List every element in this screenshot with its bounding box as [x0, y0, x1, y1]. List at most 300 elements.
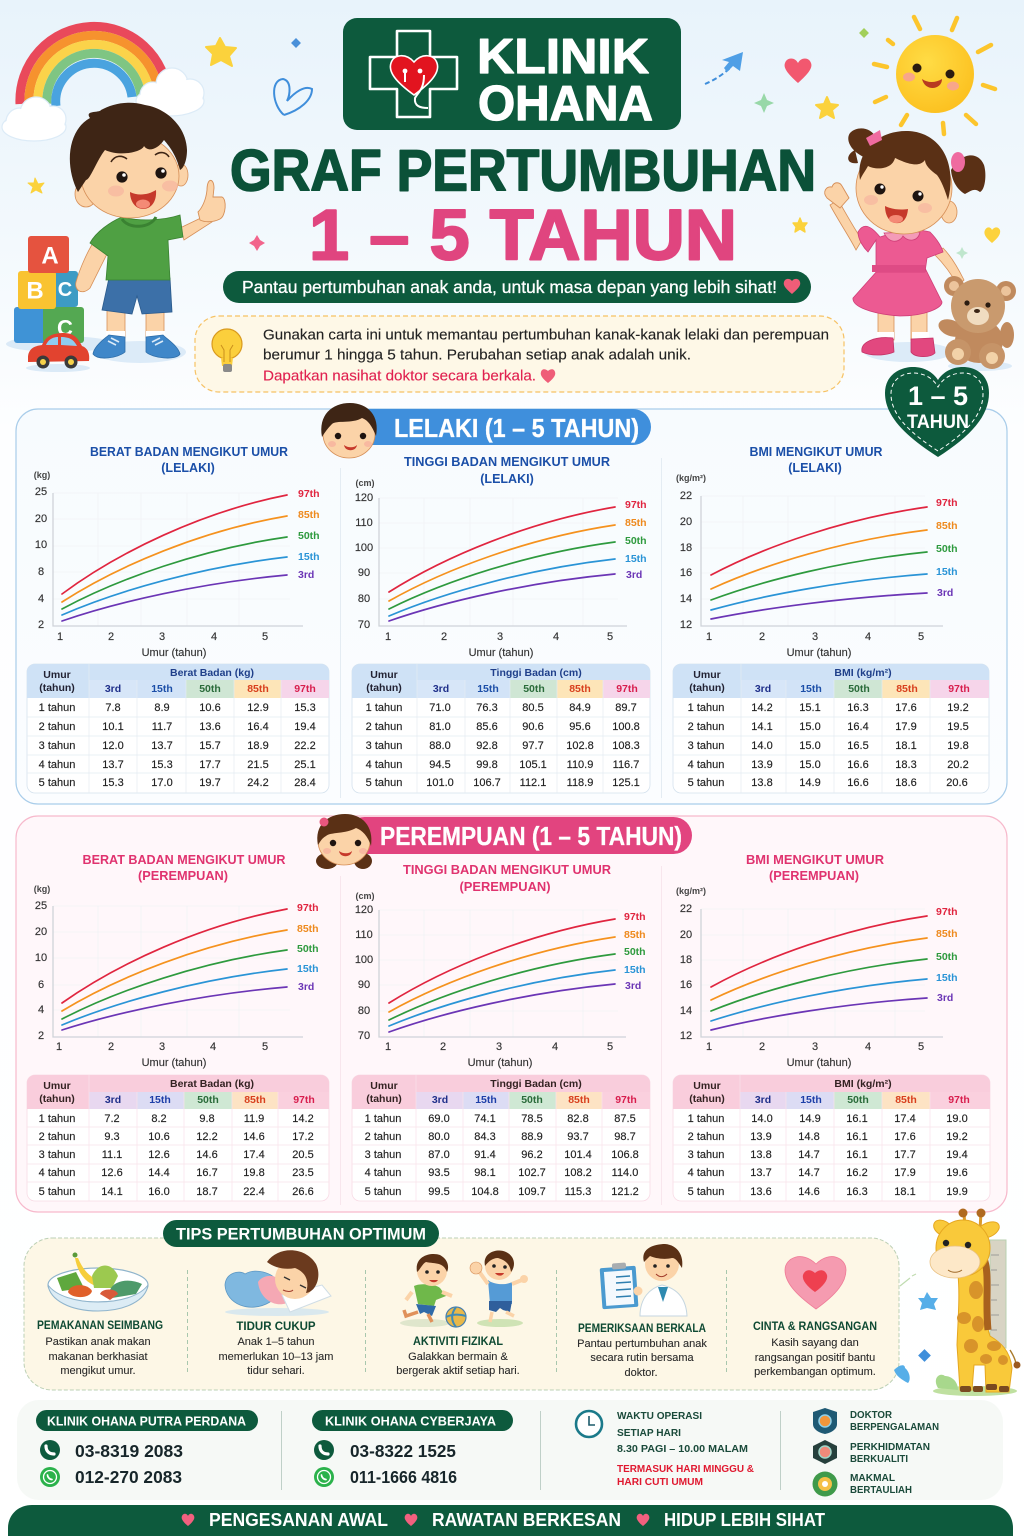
table: tinggi badan perempuan: 98.1 [474, 1167, 496, 1179]
table: berat badan lelaki: 1 tahun [39, 702, 75, 714]
chart: bmi perempuan: 12 [680, 1030, 692, 1042]
illustration: alphabet blocks and toy car: B [26, 278, 44, 304]
note box: Dapatkan nasihat doktor secara berkala. [263, 368, 536, 384]
table: tinggi badan perempuan: 85th [568, 1094, 590, 1106]
table: tinggi badan perempuan: 104.8 [471, 1186, 499, 1198]
table: bmi perempuan: 14.8 [798, 1131, 820, 1143]
chart: bmi lelaki: BMI MENGIKUT UMUR [750, 445, 882, 459]
illustration: girl waving [825, 128, 985, 362]
table: tinggi badan lelaki: 112.1 [520, 777, 546, 789]
table: berat badan perempuan: Umur [43, 1080, 71, 1092]
note box [195, 316, 844, 392]
chart: bmi lelaki: 85th [936, 520, 958, 532]
table: tinggi badan perempuan [352, 1075, 650, 1201]
chart: berat badan perempuan [34, 853, 319, 1069]
table: bmi perempuan: 14.7 [798, 1167, 820, 1179]
chart: berat badan perempuan: 10 [35, 952, 47, 964]
operating hours: 8.30 PAGI – 10.00 MALAM [617, 1443, 748, 1455]
chart: berat badan lelaki: BERAT BADAN MENGIKUT UMUR [90, 445, 288, 459]
badges: doctor, service, accreditation [812, 1408, 939, 1496]
tip: pemeriksaan berkala: Pantau pertumbuhan anak [577, 1338, 707, 1350]
table: tinggi badan lelaki: 4 tahun [366, 759, 402, 771]
table: tinggi badan perempuan: 84.3 [474, 1131, 496, 1143]
table: tinggi badan perempuan: 3rd [432, 1094, 448, 1106]
table: bmi lelaki: 4 tahun [688, 759, 724, 771]
icon: children playing ball [400, 1251, 528, 1327]
table: tinggi badan perempuan: 5 tahun [365, 1186, 401, 1198]
table: berat badan lelaki: 97th [294, 683, 316, 695]
chart: bmi perempuan: 18 [680, 954, 692, 966]
tip: pemakanan seimbang [37, 1252, 163, 1377]
table: bmi lelaki: 1 tahun [688, 702, 724, 714]
illustration: alphabet blocks and toy car: C [57, 316, 73, 340]
table: berat badan lelaki: 10.1 [102, 721, 124, 733]
table: bmi perempuan: 85th [895, 1094, 917, 1106]
table: tinggi badan lelaki: 71.0 [429, 702, 451, 714]
chart: bmi lelaki: (LELAKI) [788, 461, 842, 475]
table: tinggi badan perempuan: 114.0 [612, 1167, 638, 1179]
chart: berat badan perempuan: 15th [297, 963, 319, 975]
table: tinggi badan lelaki: 50th [523, 683, 545, 695]
table: bmi perempuan: 16.1 [846, 1113, 868, 1125]
table: tinggi badan lelaki: 3rd [433, 683, 449, 695]
chart: tinggi badan lelaki: 90 [358, 567, 370, 579]
chart: bmi perempuan: BMI MENGIKUT UMUR [746, 853, 884, 867]
table: bmi lelaki: 15.0 [799, 740, 821, 752]
table: berat badan perempuan: 23.5 [292, 1167, 314, 1179]
table: berat badan perempuan: 50th [197, 1094, 219, 1106]
table: bmi lelaki: 2 tahun [688, 721, 724, 733]
table: tinggi badan perempuan: 87.5 [614, 1113, 636, 1125]
table: berat badan lelaki: 5 tahun [39, 777, 75, 789]
table: tinggi badan perempuan: 98.7 [614, 1131, 636, 1143]
table: tinggi badan perempuan: 78.5 [521, 1113, 543, 1125]
table: berat badan lelaki: 7.8 [105, 702, 121, 714]
table: bmi perempuan: 19.0 [946, 1113, 968, 1125]
table: tinggi badan lelaki: 99.8 [476, 759, 498, 771]
table: bmi lelaki: 50th [848, 683, 870, 695]
chart: bmi lelaki: 3 [812, 631, 818, 643]
chart: bmi perempuan: 1 [706, 1041, 712, 1053]
chart: bmi perempuan: 3 [812, 1041, 818, 1053]
table: bmi perempuan: 17.7 [894, 1149, 916, 1161]
table: tinggi badan lelaki: 97.7 [522, 740, 544, 752]
note box: Gunakan carta ini untuk memantau pertumbuhan kanak-kanak lelaki dan perempuan [263, 326, 829, 344]
chart: bmi lelaki: Umur (tahun) [787, 647, 851, 659]
table: berat badan lelaki: 15.3 [294, 702, 316, 714]
tips heading pill [163, 1220, 439, 1247]
table: tinggi badan lelaki: 85.6 [476, 721, 498, 733]
table: berat badan lelaki: 15.7 [199, 740, 221, 752]
chart: tinggi badan lelaki: 4 [553, 631, 559, 643]
chart: berat badan perempuan: 4 [38, 1004, 44, 1016]
illustration: rainbow with clouds [2, 26, 204, 141]
table: berat badan perempuan: 12.6 [101, 1167, 123, 1179]
chart: tinggi badan lelaki: (cm) [355, 478, 375, 488]
table: bmi perempuan: 14.7 [798, 1149, 820, 1161]
table: berat badan lelaki: 3rd [105, 683, 121, 695]
chart: bmi lelaki: 97th [936, 497, 958, 509]
table: berat badan lelaki: 16.4 [247, 721, 269, 733]
table: berat badan lelaki: 22.2 [294, 740, 316, 752]
table: tinggi badan lelaki: 100.8 [612, 721, 640, 733]
footer bar: RAWATAN BERKESAN [432, 1510, 621, 1530]
table: tinggi badan perempuan: 93.5 [428, 1167, 450, 1179]
table: berat badan perempuan: 3 tahun [39, 1149, 75, 1161]
table: tinggi badan lelaki [352, 664, 650, 793]
table: berat badan perempuan: 26.6 [292, 1186, 314, 1198]
illustration: giraffe with ruler [930, 1208, 1020, 1396]
chart: berat badan perempuan: 25 [35, 900, 47, 912]
table: bmi lelaki: (tahun) [689, 682, 725, 694]
table: bmi lelaki: 5 tahun [688, 777, 724, 789]
chart: berat badan perempuan: BERAT BADAN MENGIKUT UMUR [82, 853, 286, 867]
chart: berat badan lelaki: Umur (tahun) [142, 647, 206, 659]
table: berat badan lelaki: 2 tahun [39, 721, 75, 733]
table: tinggi badan lelaki: 81.0 [429, 721, 451, 733]
chart: tinggi badan perempuan: 120 [355, 904, 373, 916]
table: bmi lelaki: 19.8 [947, 740, 969, 752]
operating hours: TERMASUK HARI MINGGU & [617, 1463, 754, 1475]
chart: berat badan lelaki: 1 [57, 631, 63, 643]
tagline pill: Pantau pertumbuhan anak anda, untuk masa depan yang lebih sihat! [242, 277, 777, 297]
chart: bmi lelaki: 1 [706, 631, 712, 643]
table: tinggi badan lelaki: 106.7 [473, 777, 501, 789]
table: bmi lelaki: 3rd [755, 683, 771, 695]
chart: berat badan lelaki: 5 [262, 631, 268, 643]
table: tinggi badan perempuan: 74.1 [474, 1113, 496, 1125]
chart: berat badan lelaki: 20 [35, 513, 47, 525]
chart: tinggi badan lelaki: 3rd [626, 569, 642, 581]
table: bmi lelaki: 18.1 [895, 740, 917, 752]
table: tinggi badan perempuan: 97th [615, 1094, 637, 1106]
chart: berat badan perempuan: Umur (tahun) [142, 1057, 206, 1069]
tip: tidur cukup: Anak 1–5 tahun [237, 1336, 315, 1348]
table: berat badan perempuan: 12.6 [148, 1149, 170, 1161]
clinic: cyberjaya [312, 1410, 513, 1487]
table: bmi lelaki: 15.0 [799, 721, 821, 733]
tip: cinta dan rangsangan: rangsangan positif bantu [755, 1352, 875, 1364]
table: tinggi badan perempuan: 4 tahun [365, 1167, 401, 1179]
table: bmi perempuan: 17.9 [894, 1167, 916, 1179]
table: berat badan perempuan: 3rd [105, 1094, 121, 1106]
tip: pemakanan seimbang: PEMAKANAN SEIMBANG [37, 1320, 163, 1332]
table: bmi perempuan: 15th [800, 1094, 822, 1106]
table: berat badan perempuan: 11.1 [102, 1149, 122, 1161]
table: bmi perempuan: 1 tahun [688, 1113, 724, 1125]
chart: berat badan perempuan: 97th [297, 902, 319, 914]
footer bar: HIDUP LEBIH SIHAT [664, 1510, 825, 1530]
chart: bmi lelaki: 2 [759, 631, 765, 643]
chart: tinggi badan perempuan: 3 [496, 1041, 502, 1053]
table: bmi lelaki: 18.3 [895, 759, 917, 771]
chart: berat badan lelaki: 4 [211, 631, 217, 643]
illustration: teddy bear [936, 276, 1016, 371]
tip: tidur cukup: tidur sehari. [247, 1365, 305, 1377]
chart: bmi perempuan: 85th [936, 928, 958, 940]
icon: heart [785, 1257, 846, 1309]
table: tinggi badan lelaki: 105.1 [519, 759, 547, 771]
table: berat badan lelaki: 8.9 [154, 702, 170, 714]
table: berat badan lelaki: 12.0 [102, 740, 124, 752]
chart: tinggi badan lelaki: (LELAKI) [480, 472, 534, 486]
badge: heart 1-5 tahun: 1 – 5 [908, 381, 968, 411]
table: bmi lelaki: Umur [693, 669, 721, 681]
chart: tinggi badan lelaki: 3 [497, 631, 503, 643]
chart: tinggi badan lelaki: 85th [625, 517, 647, 529]
table: tinggi badan perempuan: Umur [370, 1080, 398, 1092]
chart: berat badan lelaki: 2 [38, 619, 44, 631]
chart: bmi lelaki: 22 [680, 490, 692, 502]
clinic: putra perdana [36, 1410, 258, 1487]
chart: tinggi badan perempuan: 15th [624, 964, 646, 976]
clinic: putra perdana: KLINIK OHANA PUTRA PERDANA [47, 1414, 247, 1428]
table: berat badan lelaki: Berat Badan (kg) [170, 667, 254, 679]
chart: tinggi badan lelaki: 70 [358, 619, 370, 631]
chart: bmi lelaki: 50th [936, 543, 958, 555]
table: bmi lelaki: 85th [896, 683, 918, 695]
table: bmi lelaki: 19.2 [947, 702, 969, 714]
table: berat badan perempuan: 9.8 [199, 1113, 215, 1125]
table: tinggi badan perempuan: 121.2 [611, 1186, 639, 1198]
chart: berat badan perempuan: 4 [210, 1041, 216, 1053]
table: berat badan lelaki: 15th [151, 683, 173, 695]
tip: aktiviti fizikal: bergerak aktif setiap hari. [396, 1365, 520, 1377]
icon: girl face [316, 814, 372, 869]
tip: pemeriksaan berkala [577, 1244, 707, 1379]
tip: aktiviti fizikal [396, 1251, 528, 1377]
chart: tinggi badan perempuan: 2 [440, 1041, 446, 1053]
table: berat badan lelaki: 19.7 [199, 777, 221, 789]
table: tinggi badan perempuan: 115.3 [565, 1186, 591, 1198]
table: berat badan perempuan: 17.4 [243, 1149, 265, 1161]
illustration: alphabet blocks and toy car: C [58, 279, 72, 301]
table: bmi perempuan: 16.2 [846, 1167, 868, 1179]
badges: doctor, service, accreditation: MAKMAL [850, 1472, 896, 1484]
table: berat badan perempuan: 14.6 [243, 1131, 265, 1143]
tip: pemeriksaan berkala: doktor. [624, 1367, 658, 1379]
banner: lelaki: LELAKI (1 – 5 TAHUN) [394, 413, 639, 443]
table: berat badan lelaki: 11.7 [152, 721, 172, 733]
chart: bmi lelaki: 16 [680, 567, 692, 579]
chart: bmi perempuan: (kg/m²) [676, 886, 706, 896]
table: tinggi badan lelaki: 80.5 [522, 702, 544, 714]
chart: berat badan perempuan: 2 [108, 1041, 114, 1053]
badges: doctor, service, accreditation: PERKHIDMATAN [850, 1441, 930, 1453]
table: berat badan perempuan: 97th [293, 1094, 315, 1106]
chart: berat badan perempuan: 3 [159, 1041, 165, 1053]
table: tinggi badan lelaki: 116.7 [613, 759, 639, 771]
decorative shapes near giraffe [894, 1274, 938, 1383]
table: berat badan perempuan: 22.4 [243, 1186, 265, 1198]
table: bmi perempuan: 13.7 [750, 1167, 772, 1179]
table: bmi lelaki: 15.1 [799, 702, 821, 714]
table: bmi perempuan [673, 1075, 990, 1201]
table: tinggi badan perempuan: 106.8 [611, 1149, 639, 1161]
table: bmi perempuan: 2 tahun [688, 1131, 724, 1143]
table: berat badan lelaki: 24.2 [247, 777, 269, 789]
table: tinggi badan lelaki: 1 tahun [366, 702, 402, 714]
chart: tinggi badan perempuan: Umur (tahun) [468, 1057, 532, 1069]
table: berat badan perempuan: 11.9 [244, 1113, 264, 1125]
table: bmi lelaki: 16.5 [847, 740, 869, 752]
table: tinggi badan perempuan: 91.4 [474, 1149, 496, 1161]
table: tinggi badan perempuan: 3 tahun [365, 1149, 401, 1161]
table: tinggi badan lelaki: Tinggi Badan (cm) [490, 667, 582, 679]
table: bmi perempuan: 14.6 [798, 1186, 820, 1198]
table: berat badan perempuan: 15th [149, 1094, 171, 1106]
chart: bmi lelaki: 18 [680, 542, 692, 554]
tip: pemeriksaan berkala: PEMERIKSAAN BERKALA [578, 1323, 706, 1335]
badge: heart 1-5 tahun [885, 367, 989, 457]
table: bmi perempuan: 4 tahun [688, 1167, 724, 1179]
table: berat badan perempuan: 85th [244, 1094, 266, 1106]
logo text [477, 30, 653, 131]
logo text: OHANA [478, 77, 653, 131]
table: bmi lelaki: 17.9 [895, 721, 917, 733]
table: berat badan lelaki: Umur [43, 669, 71, 681]
table: bmi lelaki: 18.6 [895, 777, 917, 789]
table: tinggi badan lelaki: 15th [477, 683, 499, 695]
tip: cinta dan rangsangan [753, 1257, 877, 1378]
table: berat badan lelaki: 13.7 [102, 759, 124, 771]
chart: bmi perempuan: (PEREMPUAN) [769, 869, 859, 883]
chart: tinggi badan perempuan: TINGGI BADAN MENGIKUT UMUR [403, 863, 611, 877]
chart: tinggi badan lelaki: Umur (tahun) [469, 647, 533, 659]
table: bmi lelaki: 16.6 [847, 759, 869, 771]
operating hours: WAKTU OPERASI [617, 1410, 702, 1422]
footer bar [8, 1505, 1013, 1536]
table: tinggi badan perempuan: 69.0 [428, 1113, 450, 1125]
icon: light bulb [212, 329, 242, 372]
table: tinggi badan perempuan: 50th [521, 1094, 543, 1106]
table: berat badan perempuan: 14.4 [148, 1167, 170, 1179]
logo box: Klinik Ohana [343, 18, 681, 131]
chart: bmi lelaki: 15th [936, 566, 958, 578]
table: bmi lelaki: 16.6 [847, 777, 869, 789]
table: berat badan perempuan: 16.7 [196, 1167, 218, 1179]
table: bmi lelaki: 14.0 [751, 740, 773, 752]
badges: doctor, service, accreditation: BERTAULIAH [850, 1484, 912, 1496]
table: bmi perempuan: 19.2 [946, 1131, 968, 1143]
table: bmi lelaki: 14.2 [751, 702, 773, 714]
table: bmi lelaki: 14.9 [799, 777, 821, 789]
banner: perempuan: PEREMPUAN (1 – 5 TAHUN) [380, 821, 682, 851]
table: bmi lelaki: 3 tahun [688, 740, 724, 752]
tips heading pill: TIPS PERTUMBUHAN OPTIMUM [176, 1224, 426, 1244]
chart: berat badan perempuan: 50th [297, 943, 319, 955]
table: bmi perempuan: 13.9 [750, 1131, 772, 1143]
chart: tinggi badan perempuan: 1 [385, 1041, 391, 1053]
table: bmi perempuan: 13.6 [750, 1186, 772, 1198]
tip: cinta dan rangsangan: CINTA & RANGSANGAN [753, 1321, 877, 1333]
operating hours [576, 1410, 754, 1488]
table: berat badan lelaki: 28.4 [294, 777, 316, 789]
chart: bmi lelaki: 20 [680, 516, 692, 528]
tagline pill [223, 271, 811, 303]
chart: bmi perempuan: 16 [680, 979, 692, 991]
table: berat badan perempuan: 14.2 [292, 1113, 314, 1125]
chart: tinggi badan perempuan: 5 [607, 1041, 613, 1053]
table: berat badan lelaki: 17.0 [151, 777, 173, 789]
tip: tidur cukup: TIDUR CUKUP [236, 1321, 316, 1333]
table: bmi perempuan: 16.3 [846, 1186, 868, 1198]
table: bmi perempuan: 5 tahun [688, 1186, 724, 1198]
chart: berat badan lelaki: 3 [159, 631, 165, 643]
table: berat badan perempuan: 20.5 [292, 1149, 314, 1161]
tip: aktiviti fizikal: AKTIVITI FIZIKAL [413, 1336, 503, 1348]
chart: berat badan perempuan: 5 [262, 1041, 268, 1053]
table: bmi perempuan: 18.1 [894, 1186, 916, 1198]
chart: bmi perempuan: 50th [936, 951, 958, 963]
table: bmi lelaki: BMI (kg/m²) [834, 667, 892, 679]
banner: lelaki [321, 403, 651, 458]
table: berat badan lelaki: 12.9 [247, 702, 269, 714]
table: berat badan lelaki: 10.6 [199, 702, 221, 714]
chart: tinggi badan perempuan: 80 [358, 1005, 370, 1017]
title: Graf Pertumbuhan: GRAF PERTUMBUHAN [230, 138, 816, 204]
table: berat badan perempuan [27, 1075, 329, 1201]
tip: pemakanan seimbang: mengikut umur. [60, 1365, 136, 1377]
table: bmi perempuan: 14.9 [799, 1113, 821, 1125]
table: berat badan lelaki: 13.7 [151, 740, 173, 752]
table: bmi lelaki: 15th [800, 683, 822, 695]
table: berat badan lelaki: (tahun) [39, 682, 75, 694]
table: tinggi badan lelaki: 3 tahun [366, 740, 402, 752]
table: tinggi badan lelaki: 108.3 [612, 740, 640, 752]
table: berat badan perempuan: 14.6 [196, 1149, 218, 1161]
table: tinggi badan perempuan: (tahun) [366, 1093, 402, 1105]
table: tinggi badan lelaki: 84.9 [569, 702, 591, 714]
table: berat badan perempuan: 8.2 [151, 1113, 167, 1125]
table: tinggi badan lelaki: 85th [569, 683, 591, 695]
illustration: alphabet blocks and toy car [6, 236, 114, 372]
badges: doctor, service, accreditation: BERKUALITI [850, 1453, 908, 1465]
table: berat badan perempuan: (tahun) [39, 1093, 75, 1105]
table: tinggi badan perempuan: Tinggi Badan (cm) [490, 1078, 582, 1090]
table: bmi lelaki [673, 664, 989, 793]
chart: tinggi badan perempuan: 70 [358, 1030, 370, 1042]
title: 1 - 5 Tahun: 1 – 5 TAHUN [309, 196, 737, 276]
icon: clock [576, 1411, 602, 1437]
chart: tinggi badan lelaki: 15th [625, 553, 647, 565]
chart: bmi lelaki: 4 [865, 631, 871, 643]
table: bmi perempuan: 3rd [755, 1094, 771, 1106]
icon: boy face [321, 403, 377, 458]
tip: pemeriksaan berkala: secara rutin bersama [590, 1352, 695, 1364]
clinic: cyberjaya: 03-8322 1525 [350, 1441, 456, 1461]
table: bmi lelaki: 17.6 [895, 702, 917, 714]
table: tinggi badan lelaki: 5 tahun [366, 777, 402, 789]
table: bmi lelaki: 15.0 [799, 759, 821, 771]
logo text: KLINIK [477, 30, 649, 84]
table: tinggi badan lelaki: 88.0 [429, 740, 451, 752]
table: berat badan lelaki: 3 tahun [39, 740, 75, 752]
icon: sleeping child [225, 1250, 331, 1316]
chart: bmi lelaki: 12 [680, 619, 692, 631]
table: bmi lelaki: 19.5 [947, 721, 969, 733]
chart: tinggi badan lelaki: 100 [355, 542, 373, 554]
table: berat badan perempuan: 19.8 [243, 1167, 265, 1179]
chart: tinggi badan lelaki: 5 [607, 631, 613, 643]
chart: tinggi badan lelaki: 120 [355, 492, 373, 504]
chart: bmi perempuan: 3rd [937, 992, 953, 1004]
chart: berat badan perempuan: (kg) [34, 884, 50, 894]
decorative stars, hearts and sparkles left [28, 38, 312, 251]
chart: tinggi badan lelaki: TINGGI BADAN MENGIKUT UMUR [404, 455, 610, 469]
table: berat badan lelaki: 19.4 [294, 721, 316, 733]
table: berat badan perempuan: 7.2 [104, 1113, 120, 1125]
